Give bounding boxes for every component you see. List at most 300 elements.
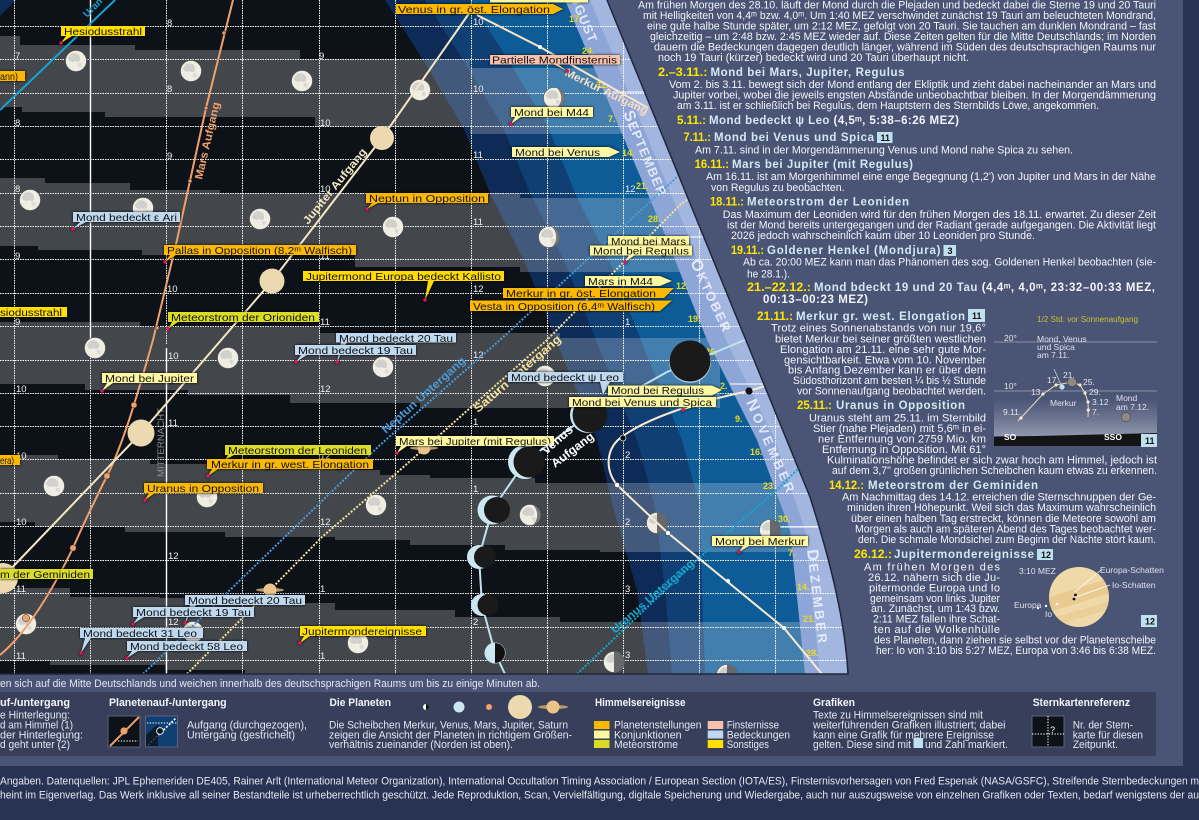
date labels on the month strip: 14. xyxy=(622,148,635,158)
hour labels: 10 xyxy=(320,118,331,129)
legend: Die Planeten: Die Scheibchen Merkur, Venus, Mars, Jupiter, Saturn xyxy=(329,720,568,732)
Venus rise line and discs xyxy=(467,340,745,674)
legend: Mondauf-/untergang: der Hinterlegung: xyxy=(0,730,83,742)
text: Mars Jupiter Regulus xyxy=(669,79,1156,112)
heading: 21.-22.12.: 21.–22.12.: xyxy=(747,280,811,294)
text: Jupitermonde: pitermonde Europa und Io xyxy=(869,582,1000,594)
label: Jupitermondereignisse xyxy=(298,626,426,645)
text: Mars Jupiter Regulus: am 3.11. ist er schließlich bei Regulus, dem Hauptstern des Sternbilds Löwe, angekommen. xyxy=(677,100,1099,112)
text: Leoniden: 2026 jedoch wahrscheinlich kaum über 10 Leoniden pro Stunde. xyxy=(731,230,1035,242)
heading: 26.12.: 12 xyxy=(1041,550,1051,560)
text: Mars Jupiter xyxy=(706,171,1156,194)
legend: Die Planeten: verhältnis zueinander (Norden ist oben). xyxy=(329,739,513,751)
event labels xyxy=(0,0,808,660)
hour labels: 8 xyxy=(15,118,20,129)
chart: Jupiter moons graphic: Io xyxy=(1045,609,1052,619)
chart: Merkur elongation graphic: Mond xyxy=(1116,393,1138,403)
heading: 7.11.: Mond bei Venus und Spica xyxy=(714,132,875,144)
heading: 19.11.: 3 xyxy=(948,246,953,256)
chart: Merkur elongation graphic: am 7.11. xyxy=(1037,350,1069,360)
heading: 18.11.: 18.11.: xyxy=(710,194,744,208)
hour labels: 9 xyxy=(319,51,324,62)
label: Mond bedeckt 20 Tau: Mond bedeckt 20 Tau xyxy=(339,333,453,345)
heading: 26.12.: 26.12.: xyxy=(854,547,892,561)
heading: 14.12. xyxy=(829,478,1038,492)
heading: 21.-22.12. xyxy=(747,280,1155,306)
label: Leoniden xyxy=(225,445,371,460)
legend: Grafiken: kann eine Grafik für mehrere Ereignisse xyxy=(813,730,994,742)
chart: Merkur elongation graphic: 10° xyxy=(1004,381,1017,391)
icon: planet set xyxy=(146,716,178,747)
heading: 19.11.: Goldener Henkel (Mondjura) xyxy=(767,245,941,257)
month names: OKTOBER xyxy=(686,257,735,335)
legend: Himmelsereignisse: Sonstiges xyxy=(727,739,769,751)
text: Geminiden: über einen halben Tag erstreckt, können die Meteore sowohl am xyxy=(851,513,1156,525)
label: Merkur ost: Merkur in gr. öst. Elongation xyxy=(506,288,656,300)
hour labels: 10 xyxy=(16,517,27,528)
heading: 26.12.: Jupitermondereignisse xyxy=(894,549,1034,561)
date labels on the month strip: 21. xyxy=(636,181,649,191)
text: Leoniden: ist der Mond bereits untergegangen und der Radiant gerade aufgegangen. Die Aktivität liegt xyxy=(727,220,1156,232)
legend: Mondauf-/untergang: d am Himmel (1) xyxy=(0,720,73,732)
date labels on the month strip xyxy=(569,14,819,658)
label: Mond bedeckt 19 Tau xyxy=(294,345,416,364)
label: Mond bei Venus und Spica: Mond bei Venus und Spica xyxy=(572,397,712,409)
chart: Merkur elongation graphic: SSO xyxy=(1104,432,1122,442)
label: Mond bei Mars: Mond bei Mars xyxy=(611,236,686,248)
label: Mond bei M44 xyxy=(509,107,593,126)
altitude lines xyxy=(994,342,1157,391)
evening twilight corner xyxy=(0,0,16,16)
text: Jupitermonde: Am frühen Morgen des xyxy=(864,562,1000,574)
label: Mond bei Regulus upper: Mond bei Regulus xyxy=(593,246,689,258)
label: Venus in gr. ost. Elongation: Venus in gr. öst. Elongation xyxy=(398,4,550,16)
hour labels: 10 xyxy=(320,184,331,195)
heading: 7.11.: 11 xyxy=(880,133,890,143)
heading: 26.12. xyxy=(854,547,1053,561)
label: Vesta: Vesta in Opposition (6,4ᵐ Walfisch) xyxy=(473,301,655,313)
hour labels: 12 xyxy=(473,350,484,361)
text: Jupitermonde: her: Io von 3:10 bis 5:27 MEZ, Europa von 3:46 bis 6:38 MEZ. xyxy=(876,645,1156,657)
chart: Merkur elongation graphic: 21. xyxy=(1063,370,1075,380)
label: Mond bedeckt psi Leo: Mond bedeckt ψ Leo xyxy=(511,372,619,384)
hour labels: 12 xyxy=(320,517,331,528)
text: Merkur Elongation: bietet Merkur bei seiner größten westlichen xyxy=(775,334,986,346)
heading: 5.11.: 5.11.: xyxy=(677,113,706,127)
date labels on the month strip: 28. xyxy=(648,214,661,224)
label: Mond bedeckt 19 Tau lower: Mond bedeckt 19 Tau xyxy=(136,607,251,619)
hour labels: 12 xyxy=(320,451,331,462)
twilight zone: nautical xyxy=(385,0,672,674)
icon: star chart reference: ? xyxy=(1050,725,1055,735)
heading: 21.11.: 21.11.: xyxy=(757,309,793,323)
label: Pallas xyxy=(163,245,356,264)
text: Geminiden: den. Die schmale Mondsichel zum Beginn der Nächte stört kaum. xyxy=(858,534,1156,546)
chart: Merkur elongation graphic: 25. xyxy=(1083,377,1095,387)
legend: Himmelsereignisse: Finsternisse xyxy=(727,720,779,732)
month names: SEPTEMBER xyxy=(619,108,671,199)
text: Plejaden paragraph: mit Helligkeiten von 4,4ᵐ bzw. 4,0ᵐ. Um 1:40 MEZ verschwindet zunächst 19 Tauri am beleuchteten Mondrand, xyxy=(643,10,1156,22)
chart: Merkur elongation graphic: 17. xyxy=(1047,375,1059,385)
Mercury morning line xyxy=(477,15,650,118)
label: Uranus in Opposition xyxy=(143,483,263,502)
text: Mars Jupiter: von Regulus zu beobachten. xyxy=(711,182,844,194)
label: Uranus in Opposition: Uranus in Opposition xyxy=(147,483,259,495)
label: Partielle Mondfinsternis xyxy=(490,54,620,73)
legend: Himmelsereignisse xyxy=(594,697,790,751)
legend: Die Planeten: zeigen die Ansicht der Planeten in richtigem Größen- xyxy=(329,730,572,742)
heading: 14.12.: Meteorstrom der Geminiden xyxy=(868,480,1038,492)
heading: 16.11.: Mars bei Jupiter (mit Regulus) xyxy=(732,159,913,171)
horizon sky xyxy=(994,398,1157,436)
month names xyxy=(561,0,831,644)
chart: Jupiter moons graphic: 12 xyxy=(1145,616,1155,626)
hour labels: 12 xyxy=(320,384,331,395)
text: Uranus: ner Entfernung von 2759 Mio. km xyxy=(818,434,986,446)
label: Merkur west xyxy=(206,459,373,478)
date labels on the month strip: 19. xyxy=(688,314,701,324)
legend background xyxy=(0,692,1156,756)
label: Hesiodusstrahl xyxy=(59,26,145,45)
text: Jupitermonde: an. Zunächst, um 1:43 bzw. xyxy=(871,603,1000,615)
icon: planet rise xyxy=(108,716,140,747)
legend: Planetenauf-/untergang: Aufgang (durchgezogen), xyxy=(187,720,307,732)
twilight zone: civil xyxy=(425,0,705,674)
label: Geminiden fragment: m der Geminiden xyxy=(0,569,90,581)
text: Mars Jupiter Regulus: Jupiter vorbei, wobei die jeweils engsten Abstände unbeobachtbar bleiben. In der Morgendämmerung xyxy=(673,90,1156,102)
text: Merkur Elongation: Trotz eines Sonnenabstands von nur 19,6° xyxy=(771,322,986,334)
chart: Merkur elongation graphic: am 7.12. xyxy=(1116,402,1149,412)
text: Plejaden paragraph xyxy=(638,0,1156,64)
month names: NOVEMBER xyxy=(742,397,799,496)
date labels on the month strip: 14. xyxy=(797,582,810,592)
hour labels: 10 xyxy=(16,384,27,395)
hour labels: 7 xyxy=(15,51,20,62)
heading: 19.11.: 19.11.: xyxy=(731,243,764,257)
legend: Himmelsereignisse: Planetenstellungen xyxy=(614,720,702,732)
text: Jupitermonde: des Planeten, dann ziehen sie selbst vor der Planetenscheibe xyxy=(874,634,1156,646)
label: Mond bedeckt 19 Tau lower xyxy=(131,607,254,626)
text: Leoniden: Das Maximum der Leoniden wird für den frühen Morgen des 18.11. erwartet. Zu dieser Zeit xyxy=(723,209,1156,221)
label: Mond bei Venus: Mond bei Venus xyxy=(515,147,600,159)
hour labels: 11 xyxy=(16,651,26,662)
chart: Merkur elongation graphic: 13. xyxy=(1031,387,1043,397)
label: Mond bei Jupiter: Mond bei Jupiter xyxy=(105,373,195,385)
hour labels: 12 xyxy=(168,617,179,628)
chart: Merkur elongation graphic: und Spica xyxy=(1037,342,1075,352)
text: Uranus: Entfernung in Opposition. Mit 61° xyxy=(822,444,986,456)
text: Plejaden paragraph: gleichzeitig – um 2:48 bzw. 2:45 MEZ wieder auf. Diese Zeiten gelten für die Mitte Deutschlands; im Norden xyxy=(650,31,1156,43)
text: Jupitermonde: gemeinsam von links Jupiter xyxy=(870,593,1000,605)
label: Kometen fragment: ann) xyxy=(0,71,18,83)
date labels on the month strip: 28. xyxy=(806,648,819,658)
hour labels: 1 xyxy=(473,484,478,495)
chart outline xyxy=(0,0,848,674)
hour labels: 12 xyxy=(168,551,179,562)
legend: Die Planeten: Die Planeten xyxy=(330,697,391,709)
midnight label: MITTERNACHT xyxy=(156,408,167,477)
Neptune set line xyxy=(143,155,700,674)
chart: Jupiter moons graphic: 3:10 MEZ xyxy=(1019,566,1056,576)
hour labels: 11 xyxy=(168,418,178,429)
chart: Merkur elongation graphic: 3.12 xyxy=(1092,397,1109,407)
legend: Grafiken xyxy=(812,697,1008,751)
text: Goldener Henkel: he 28.1.). xyxy=(747,268,790,280)
label: Mond bedeckt 20 Tau lower xyxy=(183,595,305,625)
heading: 14.12.: 14.12.: xyxy=(829,478,864,492)
hour labels xyxy=(15,17,636,662)
hour labels: 9 xyxy=(15,251,20,262)
label: Mars in M44 xyxy=(585,276,672,288)
hour labels: 8 xyxy=(167,18,172,29)
heading: 21.11.: 11 xyxy=(972,311,982,321)
text: Jupitermonde: 26.12. nähern sich die Ju- xyxy=(868,572,1000,584)
legend: Sternkartenreferenz: karte für diesen xyxy=(1073,730,1143,742)
heading: 21.11.: Merkur gr. west. Elongation xyxy=(796,311,965,323)
hour labels: 1 xyxy=(625,317,630,328)
heading: 21.-22.12.: 00:13–00:23 MEZ) xyxy=(763,294,868,306)
hour labels: 12 xyxy=(625,184,636,195)
date labels on the month strip: 17. xyxy=(569,14,582,24)
legend: Sternkartenreferenz xyxy=(1032,697,1143,751)
hour labels: 11 xyxy=(320,251,330,262)
date labels on the month strip: 23. xyxy=(763,481,776,491)
label: Partielle Mondfinsternis: Partielle Mondfinsternis xyxy=(492,54,617,66)
hour labels: 9 xyxy=(15,317,20,328)
text: Merkur Elongation: bis Anfang Dezember kann er über dem xyxy=(788,364,986,376)
date labels on the month strip: 2. xyxy=(720,381,728,391)
ground xyxy=(994,433,1157,446)
text: Uranus: Stier (nahe Plejaden) mit 5,6ᵐ in ei- xyxy=(813,423,986,435)
text: Geminiden: Am Nachmittag des 14.12. erreichen die Sternschnuppen der Ge- xyxy=(842,492,1156,504)
text: Uranus: auf dem 3,7" großen grünlichen Scheibchen kaum etwas zu erkennen. xyxy=(832,465,1157,477)
text: Merkur Elongation: gensichtbarkeit. Etwa vom 10. November xyxy=(784,354,986,366)
hour labels: 10 xyxy=(16,451,27,462)
label: Mond bedeckt epsilon Ari: Mond bedeckt ε Ari xyxy=(76,212,177,224)
hour labels: 11 xyxy=(473,217,483,228)
hour labels: 11 xyxy=(16,584,26,595)
label: Mond bedeckt epsilon Ari xyxy=(71,212,180,231)
label: Jupitermondereignisse: Jupitermondereignisse xyxy=(302,626,422,638)
heading: 5.11.: Mond bedeckt ψ Leo (4,5ᵐ, 5:38–6:26 MEZ) xyxy=(709,115,959,127)
label: Mond bedeckt 19 Tau: Mond bedeckt 19 Tau xyxy=(298,345,413,357)
heading: 16.11.: 16.11.: xyxy=(695,157,729,171)
legend: Grafiken: weiterführenden Grafiken illustriert; dabei xyxy=(812,720,1006,732)
hour labels: 1 xyxy=(320,584,325,595)
hour labels: 3 xyxy=(625,650,630,661)
label: Mond bedeckt 31 Leo: Mond bedeckt 31 Leo xyxy=(83,628,197,640)
label: Mars bei Jupiter: Mars bei Jupiter (mit Regulus) xyxy=(399,436,551,448)
hour labels: 2 xyxy=(625,450,630,461)
heading: 25.11.: 25.11.: xyxy=(797,398,832,412)
midnight line xyxy=(90,0,166,674)
Merkur path xyxy=(1018,369,1131,422)
label: Pallas: Pallas in Opposition (8,2ᵐ Walfisch) xyxy=(167,245,352,257)
legend: Sternkartenreferenz: Sternkartenreferenz xyxy=(1033,697,1130,709)
label: Jupitermond Europa xyxy=(303,271,504,302)
Saturn set line xyxy=(187,190,700,674)
Jupiter rise line xyxy=(0,12,470,593)
chart: Merkur elongation graphic: 20° xyxy=(1004,333,1017,343)
date labels on the month strip: 31. xyxy=(596,80,609,90)
hour labels: 12 xyxy=(473,284,484,295)
label: Jupitermond Europa: Jupitermond Europa bedeckt Kallisto xyxy=(306,271,501,283)
text: Leoniden xyxy=(723,209,1156,242)
hour labels: 10 xyxy=(168,351,179,362)
chart: Merkur elongation graphic: 29. xyxy=(1089,387,1101,397)
legend: Die Planeten xyxy=(329,695,572,751)
label: Mars bei Jupiter xyxy=(395,436,554,455)
label: Mond bei Merkur xyxy=(712,536,808,554)
grid lines xyxy=(0,0,860,674)
hour labels: 8 xyxy=(15,184,20,195)
Mars rise line xyxy=(0,0,233,655)
chart: Jupiter moons graphic: Io-Schatten xyxy=(1112,580,1156,590)
hour labels: 1 xyxy=(473,417,478,428)
hour labels: 11 xyxy=(473,150,483,161)
hour labels: 11 xyxy=(320,317,330,328)
footer text xyxy=(0,776,1199,802)
panel: star chart xyxy=(0,0,860,690)
legend: Planetenauf-/untergang: Planetenauf-/untergang xyxy=(109,697,227,709)
month strip xyxy=(566,0,820,674)
text: Uranus: Uranus steht am 25.11. im Sternbild xyxy=(809,412,986,424)
legend: Grafiken: Texte zu Himmelsereignissen sind mit xyxy=(813,710,983,722)
label: Neptun in Opposition: Neptun in Opposition xyxy=(369,193,485,205)
date labels on the month strip: 30. xyxy=(778,514,791,524)
hour labels: 3 xyxy=(625,584,630,595)
moon phases xyxy=(16,50,780,686)
Mercury rise line xyxy=(608,386,822,674)
date labels on the month strip: 5. xyxy=(664,248,672,258)
chart: Merkur elongation graphic: Merkur xyxy=(1050,398,1077,408)
label: Merkur bei fragment xyxy=(490,0,588,2)
heading: 18.11. xyxy=(710,194,909,208)
date labels on the month strip: 7. xyxy=(608,114,616,124)
Neptune set line: Neptun Untergang xyxy=(380,355,468,436)
legend: Mondauf-/untergang xyxy=(0,697,83,751)
moonlit night bands xyxy=(0,36,860,674)
Jupiter rise line: Jupiter Aufgang xyxy=(301,146,369,227)
label: Mond bedeckt psi Leo xyxy=(508,372,623,395)
month separators xyxy=(612,92,830,527)
caption: en sich auf die Mitte Deutschlands und weichen innerhalb des deutschsprachigen Raums um bis zu einige Minuten ab. xyxy=(0,678,540,690)
hour labels: 2 xyxy=(625,517,630,528)
date labels on the month strip: 7. xyxy=(788,548,796,558)
heading: 21.11. xyxy=(757,309,985,323)
label: Orioniden xyxy=(166,312,319,331)
legend: Planetenauf-/untergang: Untergang (gestrichelt) xyxy=(187,730,295,742)
label: Hesiodusstrahl fragment: siodusstrahl xyxy=(0,307,62,319)
label: fragment era: era) xyxy=(0,455,14,467)
label: Mond bedeckt 31 Leo xyxy=(79,628,203,655)
hour labels: 9 xyxy=(167,151,172,162)
Venus rise label: Venus xyxy=(539,422,576,457)
Mars rise line: Mars Aufgang xyxy=(193,101,223,181)
legend: Mondauf-/untergang: e Hinterlegung: xyxy=(0,710,70,722)
chart: Merkur elongation graphic: SO xyxy=(1004,432,1017,442)
hour labels: 10 xyxy=(473,17,484,28)
date labels on the month strip: 12. xyxy=(676,281,689,291)
legend: Grafiken: Grafiken xyxy=(813,697,855,709)
label: Mars in M44: Mars in M44 xyxy=(588,276,653,288)
chart: Jupiter moons graphic: Europa-Schatten xyxy=(1100,565,1164,575)
text: Jupitermonde xyxy=(864,562,1156,657)
icon: planet discs xyxy=(423,695,568,719)
month strip lighter inner band xyxy=(590,0,860,674)
chart: Merkur elongation graphic: 7. xyxy=(1092,407,1099,417)
label: Mond bei M44: Mond bei M44 xyxy=(514,107,589,119)
legend: Himmelsereignisse: Meteorströme xyxy=(614,739,678,751)
legend: Planetenauf-/untergang xyxy=(108,697,307,747)
legend: Himmelsereignisse: Bedeckungen xyxy=(727,730,790,742)
Saturn set line: Saturn Untergang xyxy=(472,333,564,415)
legend: Himmelsereignisse: Konjunktionen xyxy=(614,730,682,742)
legend: Mondauf-/untergang: uf-/untergang xyxy=(0,697,70,709)
label: Leoniden: Meteorstrom der Leoniden xyxy=(228,445,367,457)
label: Mond bei Venus xyxy=(512,147,620,159)
date labels on the month strip: 9. xyxy=(735,414,743,424)
Uranus set line xyxy=(577,462,805,674)
text: Geminiden: Morgen als auch am späteren Abend des Tages beobachtet wer- xyxy=(855,524,1156,536)
text: Goldener Henkel: Ab ca. 20:00 MEZ kann man das Phänomen des sog. Goldenen Henkel beobachten (sie- xyxy=(743,256,1156,268)
text: Merkur Elongation: vor Sonnenaufgang beobachtet werden. xyxy=(797,386,986,398)
text: Uranus xyxy=(809,412,1157,477)
date labels on the month strip: 16. xyxy=(750,447,763,457)
Uranus set line: Uranus Untergang xyxy=(609,558,697,636)
chart: Jupiter moons graphic: Europa xyxy=(1014,600,1042,610)
legend: Mondauf-/untergang: d geht unter (2) xyxy=(0,739,70,751)
label: Mond bei Regulus upper xyxy=(590,246,692,264)
date labels on the month strip: 24. xyxy=(582,46,595,56)
text: Goldener Henkel xyxy=(743,256,1156,280)
label: Mond bedeckt 58 Leo xyxy=(125,641,247,660)
legend: Grafiken: gelten. Diese sind mit xyxy=(813,739,911,751)
text: Jupitermonde: 2:11 MEZ fallen ihre Schat- xyxy=(873,614,1000,626)
heading: 21.-22.12.: Mond bdeckt 19 und 20 Tau (4,4ᵐ, 4,0ᵐ, 23:32–00:33 MEZ, xyxy=(814,282,1155,294)
heading: 2.-3.11.: Mond bei Mars, Jupiter, Regulus xyxy=(710,67,904,79)
hour labels: 8 xyxy=(167,84,172,95)
heading: 19.11. xyxy=(731,243,956,257)
text: Merkur Elongation xyxy=(771,322,986,398)
heading: 25.11. xyxy=(797,398,965,412)
legend: Himmelsereignisse: Himmelsereignisse xyxy=(595,697,686,709)
panel: legend xyxy=(0,692,1156,756)
legend: Grafiken: und Zahl markiert. xyxy=(925,739,1008,751)
label: Hesiodusstrahl: Hesiodusstrahl xyxy=(64,26,142,38)
month names: D EZEMBER xyxy=(803,548,831,644)
date labels on the month strip: 26. xyxy=(705,347,718,357)
Venus rise label xyxy=(539,422,597,470)
label: Mond bei Regulus lower: Mond bei Regulus xyxy=(611,385,704,397)
heading: 7.11. xyxy=(684,130,892,144)
label: Mond bei Venus und Spica xyxy=(569,397,716,412)
hour labels: 10 xyxy=(167,284,178,295)
hour labels: 10 xyxy=(473,84,484,95)
chart: Merkur elongation graphic: 11 xyxy=(1145,436,1155,446)
text: Mars Jupiter Regulus: Vom 2. bis 3.11. bewegt sich der Mond entlang der Ekliptik und zieht dabei nacheinander an Mars und xyxy=(669,79,1156,91)
text: Merkur Elongation: Südosthorizont am besten ¼ bis ½ Stunde xyxy=(793,375,986,387)
chart: Merkur elongation graphic xyxy=(994,314,1157,447)
chart: Merkur elongation graphic: 9.11. xyxy=(1003,407,1021,417)
heading: 7.11.: 7.11.: xyxy=(684,130,711,144)
twilight zone: bright xyxy=(470,0,805,674)
Mercury morning line: Merkur Aufgang xyxy=(563,67,650,118)
label: Orioniden: Meteorstrom der Orioniden xyxy=(171,312,315,324)
chart: Merkur elongation graphic: 1/2 Std. vor Sonnenaufgang xyxy=(1037,314,1138,324)
date labels on the month strip: 21. xyxy=(803,614,816,624)
hour labels: 1 xyxy=(320,651,325,662)
